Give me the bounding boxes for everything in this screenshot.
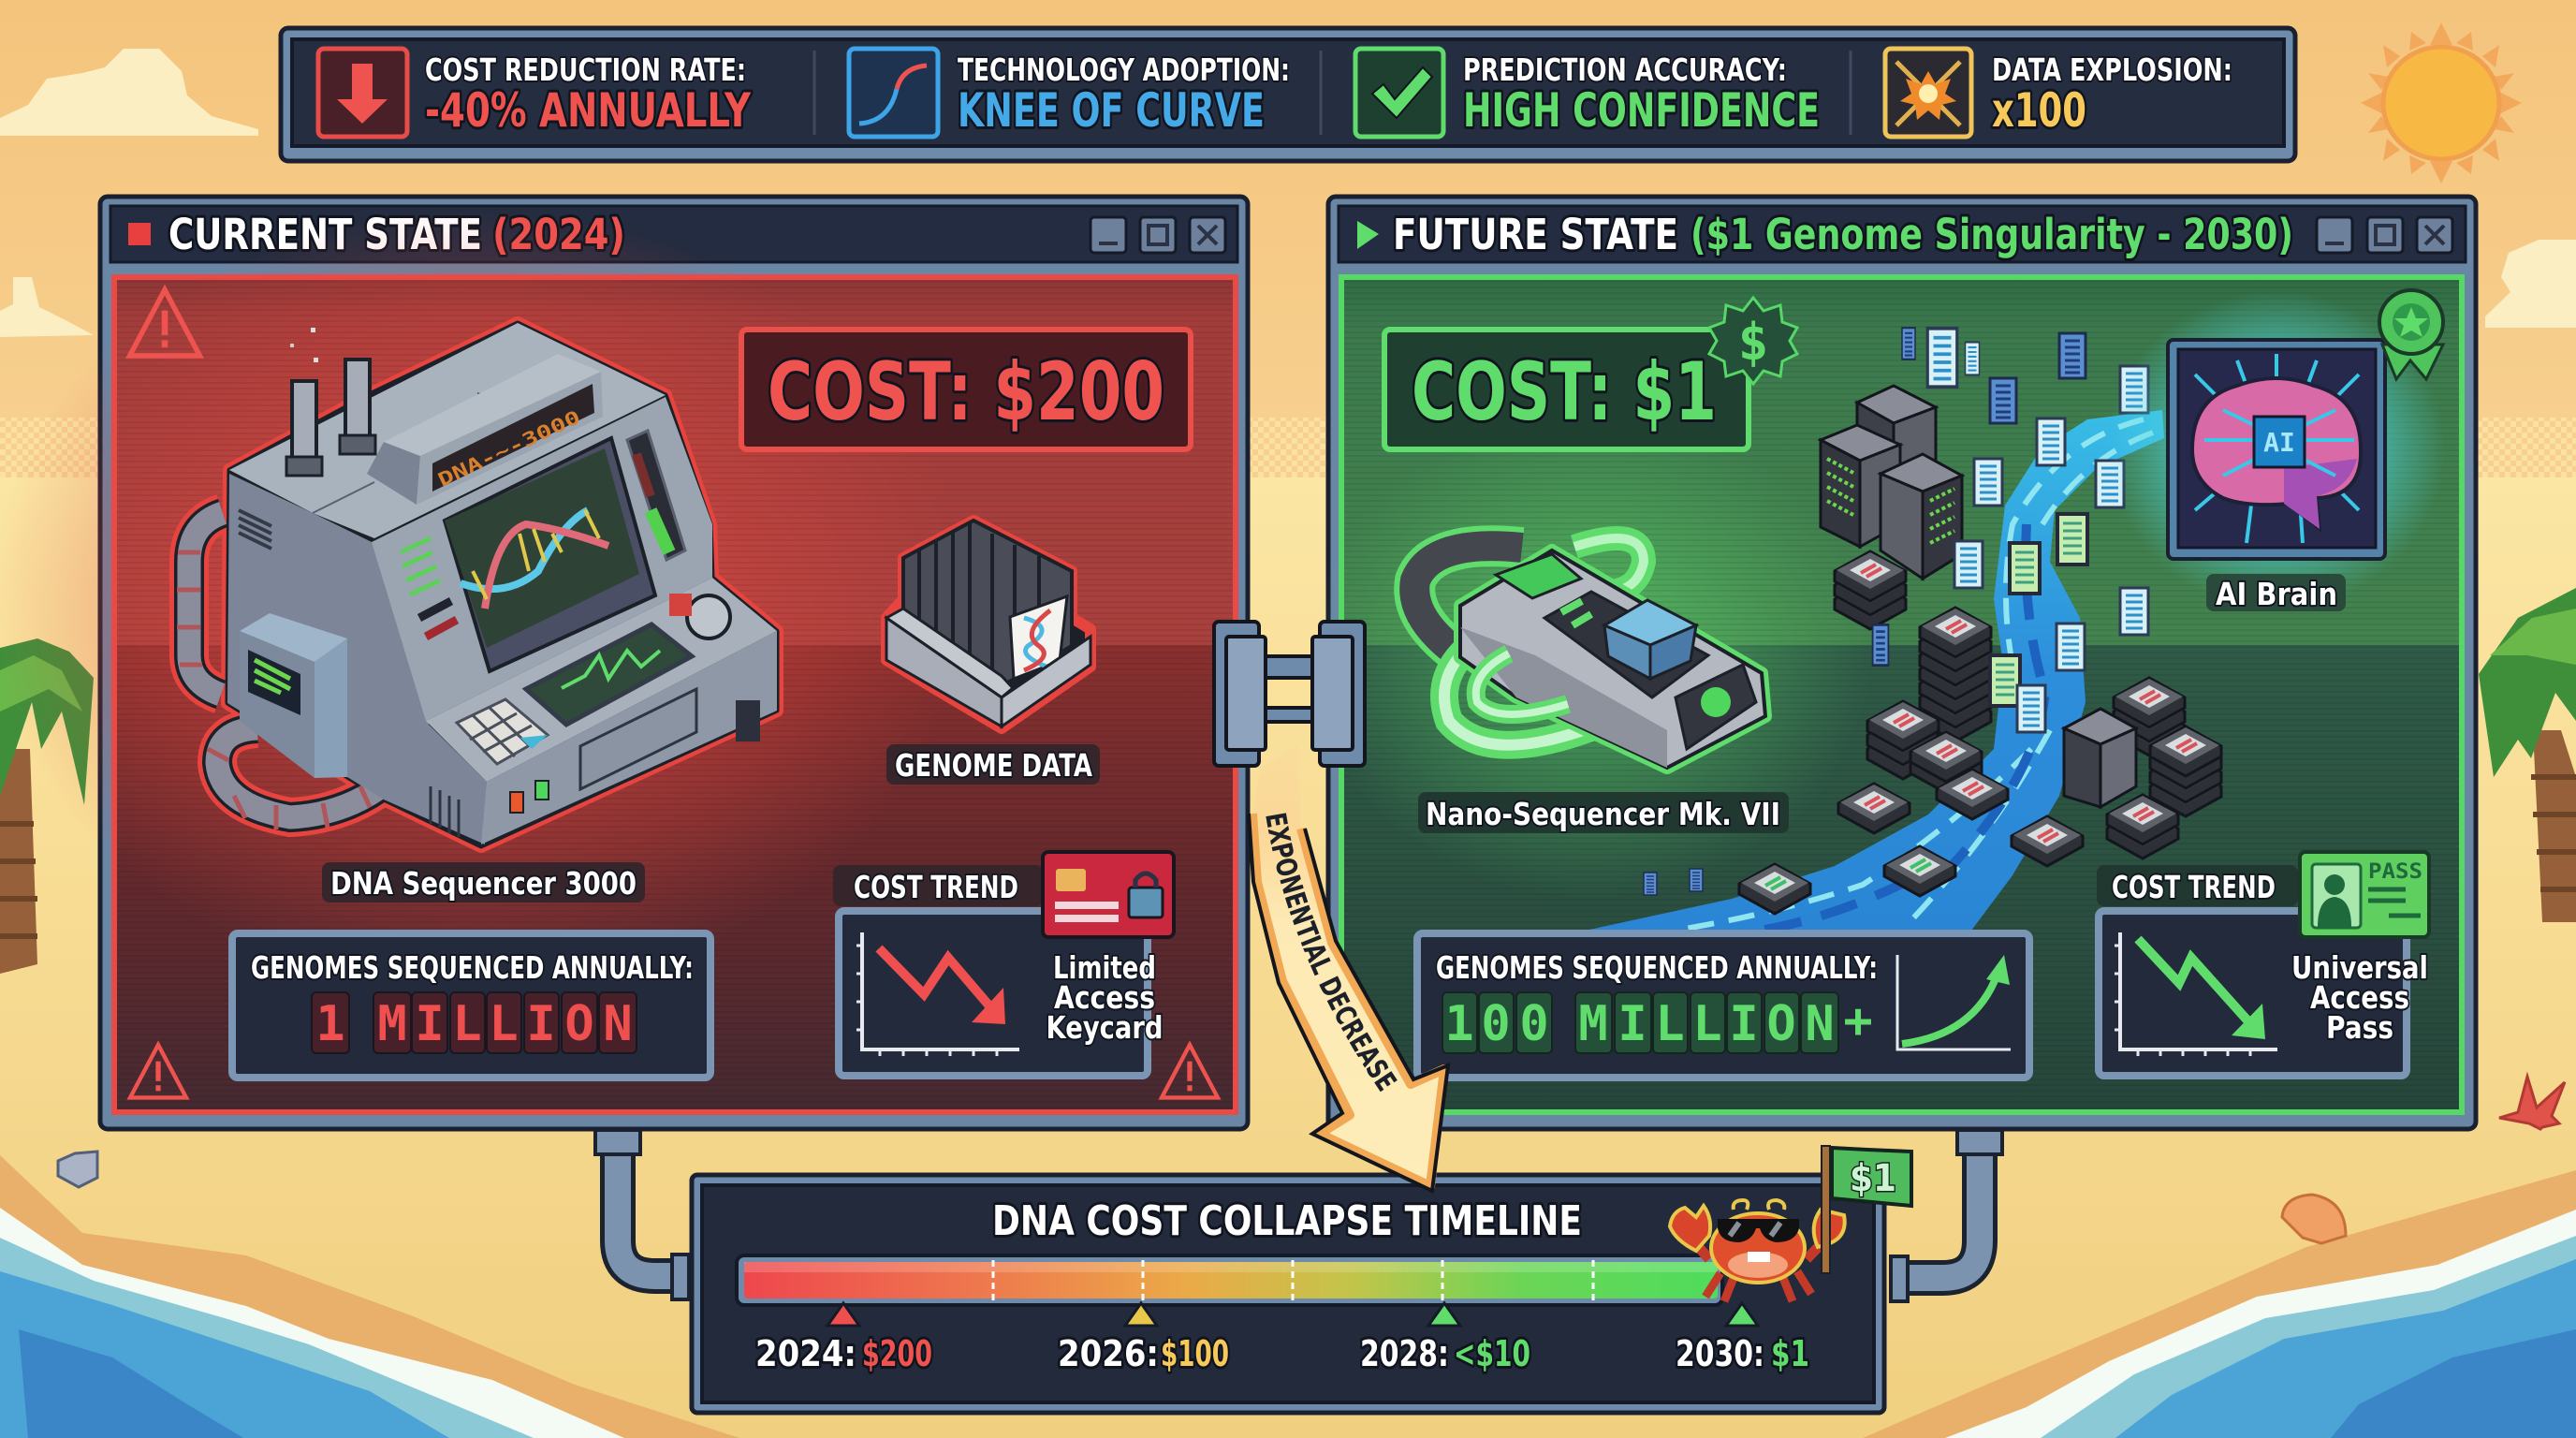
illustration: server towers bbox=[1821, 386, 1962, 579]
label: 2028 <$10: <$10 bbox=[1454, 1333, 1530, 1374]
metric: technology adoption: TECHNOLOGY ADOPTION: bbox=[958, 51, 1290, 88]
beach shore and ocean, left bbox=[0, 1155, 739, 1438]
counter: 100 million+: 1 bbox=[1444, 996, 1474, 1052]
illustration: chip stacks bbox=[1739, 551, 2221, 914]
metric: technology adoption: KNEE OF CURVE bbox=[958, 83, 1265, 138]
metric: cost reduction rate: COST REDUCTION RATE: bbox=[425, 51, 746, 88]
chart: cost trend, current: COST TREND bbox=[854, 869, 1018, 905]
caption: universal access pass: Universal bbox=[2291, 949, 2428, 986]
label: 2026 $100 bbox=[1058, 1333, 1229, 1374]
icon: sun bbox=[2361, 22, 2522, 183]
label: Nano-Sequencer Mk. VII: Nano-Sequencer Mk. VII bbox=[1426, 796, 1780, 832]
icon: shell bbox=[2282, 1195, 2346, 1243]
label: 2024 $200: $200 bbox=[862, 1333, 932, 1374]
label: AI Brain: AI Brain bbox=[2216, 576, 2337, 612]
panel: genomes sequenced annually, future bbox=[1417, 933, 2029, 1078]
label: genome data: GENOME DATA bbox=[895, 747, 1092, 784]
metric: technology adoption bbox=[849, 49, 1290, 138]
pipes to timeline bbox=[595, 1130, 2002, 1301]
icon: limited access keycard bbox=[1043, 852, 1174, 937]
counter: 100 million+: I bbox=[1617, 996, 1647, 1052]
callout: cost $1: COST: $1 bbox=[1412, 345, 1717, 439]
metric: prediction accuracy bbox=[1355, 49, 1820, 138]
counter: 1 million: N bbox=[603, 996, 633, 1052]
label: 2024 $200: 2024: bbox=[755, 1333, 856, 1374]
counter: 100 million+ bbox=[1442, 992, 1873, 1053]
beach shore and ocean, right bbox=[1863, 1170, 2576, 1438]
counter: 1 million: I bbox=[526, 996, 556, 1052]
progress bar bbox=[737, 1255, 1722, 1305]
metric: data explosion bbox=[1885, 49, 2232, 138]
counter: 100 million+: 0 bbox=[1481, 996, 1511, 1052]
metric: prediction accuracy: PREDICTION ACCURACY: bbox=[1463, 51, 1787, 88]
callout: cost $200 bbox=[741, 330, 1191, 449]
heading: timeline title: DNA COST COLLAPSE TIMELINE bbox=[992, 1197, 1582, 1245]
illustration: DNA Sequencer 3000 bbox=[177, 323, 777, 846]
caption: limited access keycard bbox=[1046, 949, 1163, 1046]
green content area bbox=[1310, 275, 2464, 1114]
palm tree right bbox=[2479, 588, 2576, 922]
metric: data explosion: x100 bbox=[1992, 83, 2086, 138]
icon: dollar badge bbox=[1709, 298, 1797, 384]
counter: 100 million+: M bbox=[1578, 996, 1608, 1052]
chart: genomes growth curve bbox=[1897, 955, 2011, 1049]
icon: warning bottom left bbox=[130, 1045, 186, 1097]
panel: genomes sequenced annually, current bbox=[232, 933, 710, 1078]
title bar bbox=[110, 206, 1237, 262]
chart: cost trend, future: COST TREND bbox=[2112, 869, 2276, 905]
callout: cost $200: COST: $200 bbox=[768, 345, 1164, 439]
caption: limited access keycard: Limited bbox=[1053, 949, 1156, 986]
counter: 100 million+: + bbox=[1843, 993, 1873, 1049]
counter: 1 million: L bbox=[452, 996, 482, 1052]
chart: cost trend, future bbox=[2097, 865, 2407, 1076]
metric: prediction accuracy: HIGH CONFIDENCE bbox=[1463, 83, 1820, 138]
illustration: Nano-Sequencer Mk. VII bbox=[1414, 538, 1765, 768]
palm tree left bbox=[0, 638, 94, 974]
counter: 100 million+: L bbox=[1692, 996, 1722, 1052]
icon: rock bbox=[58, 1152, 97, 1187]
caption: limited access keycard: Keycard bbox=[1046, 1009, 1163, 1046]
counter: 1 million: O bbox=[564, 996, 594, 1052]
label: 2030 $1: $1 bbox=[1771, 1333, 1809, 1374]
callout: cost $1 bbox=[1384, 330, 1749, 449]
counter: 1 million: L bbox=[489, 996, 519, 1052]
title bar: (2024) bbox=[492, 210, 625, 259]
top status bar bbox=[281, 28, 2295, 161]
title bar bbox=[1339, 206, 2466, 262]
icon: dollar badge: $ bbox=[1738, 313, 1768, 372]
illustration: small server bbox=[2064, 709, 2136, 807]
panel: genomes sequenced annually, current: GENOMES SEQUENCED ANNUALLY: bbox=[251, 949, 694, 986]
icon: ribbon badge bbox=[2379, 290, 2443, 379]
illustration: floating documents bbox=[1644, 328, 2148, 895]
illustration: data river bbox=[1568, 410, 2164, 934]
icon: universal access pass bbox=[2300, 852, 2429, 937]
illustration: AI brain: AI bbox=[2263, 427, 2295, 458]
panel: genomes sequenced annually, future: GENOMES SEQUENCED ANNUALLY: bbox=[1436, 949, 1878, 986]
title bar: FUTURE STATE bbox=[1393, 210, 1678, 259]
label: 2026 $100: $100 bbox=[1161, 1333, 1229, 1374]
label: 2024 $200 bbox=[755, 1333, 932, 1374]
icon: crab with flag bbox=[1670, 1146, 1911, 1301]
label: 2028 <$10 bbox=[1360, 1333, 1530, 1374]
counter: 1 million: 1 bbox=[315, 996, 345, 1052]
illustration: DNA Sequencer 3000: DNA-~-3000 bbox=[434, 405, 584, 492]
caption: universal access pass bbox=[2291, 949, 2428, 1046]
icon: crab with flag: $1 bbox=[1850, 1157, 1896, 1200]
label: 2026 $100: 2026: bbox=[1058, 1333, 1159, 1374]
arrow: exponential decrease: EXPONENTIAL DECREASE bbox=[1266, 813, 1398, 1092]
icon: universal access pass: PASS bbox=[2368, 860, 2422, 884]
illustration: AI brain bbox=[2108, 290, 2445, 609]
counter: 100 million+: L bbox=[1655, 996, 1685, 1052]
icon: warning top left bbox=[130, 290, 199, 356]
counter: 100 million+: O bbox=[1766, 996, 1796, 1052]
label: DNA Sequencer 3000: DNA Sequencer 3000 bbox=[330, 865, 637, 902]
clouds bbox=[0, 49, 2576, 337]
metric: cost reduction rate: -40% ANNUALLY bbox=[425, 83, 752, 138]
title bar: ($1 Genome Singularity - 2030) bbox=[1690, 210, 2293, 259]
metric: data explosion: DATA EXPLOSION: bbox=[1992, 51, 2232, 88]
caption: universal access pass: Access bbox=[2310, 979, 2409, 1016]
counter: 1 million bbox=[312, 992, 637, 1053]
counter: 1 million: M bbox=[377, 996, 407, 1052]
label: 2030 $1: 2030: bbox=[1676, 1333, 1764, 1374]
arrow: exponential decrease bbox=[1247, 813, 1451, 1194]
title bar: CURRENT STATE bbox=[168, 210, 482, 259]
icon: starfish bbox=[2499, 1077, 2565, 1129]
counter: 1 million: I bbox=[415, 996, 445, 1052]
label: 2028 <$10: 2028: bbox=[1360, 1333, 1449, 1374]
icon: warning bottom right bbox=[1162, 1045, 1218, 1097]
metric: cost reduction rate bbox=[318, 49, 752, 138]
panel: current state window bbox=[0, 197, 1248, 1129]
red content area bbox=[0, 206, 1237, 1114]
connector between windows bbox=[1214, 622, 1365, 766]
counter: 100 million+: 0 bbox=[1519, 996, 1549, 1052]
caption: universal access pass: Pass bbox=[2326, 1009, 2393, 1046]
illustration: genome data bbox=[886, 521, 1090, 728]
chart: cost trend, current bbox=[833, 865, 1148, 1076]
panel: timeline bbox=[692, 1175, 1884, 1413]
counter: 100 million+: I bbox=[1729, 996, 1759, 1052]
markers bbox=[827, 1303, 1758, 1326]
counter: 100 million+: N bbox=[1805, 996, 1835, 1052]
caption: limited access keycard: Access bbox=[1054, 979, 1155, 1016]
panel: future state window bbox=[1310, 197, 2476, 1129]
